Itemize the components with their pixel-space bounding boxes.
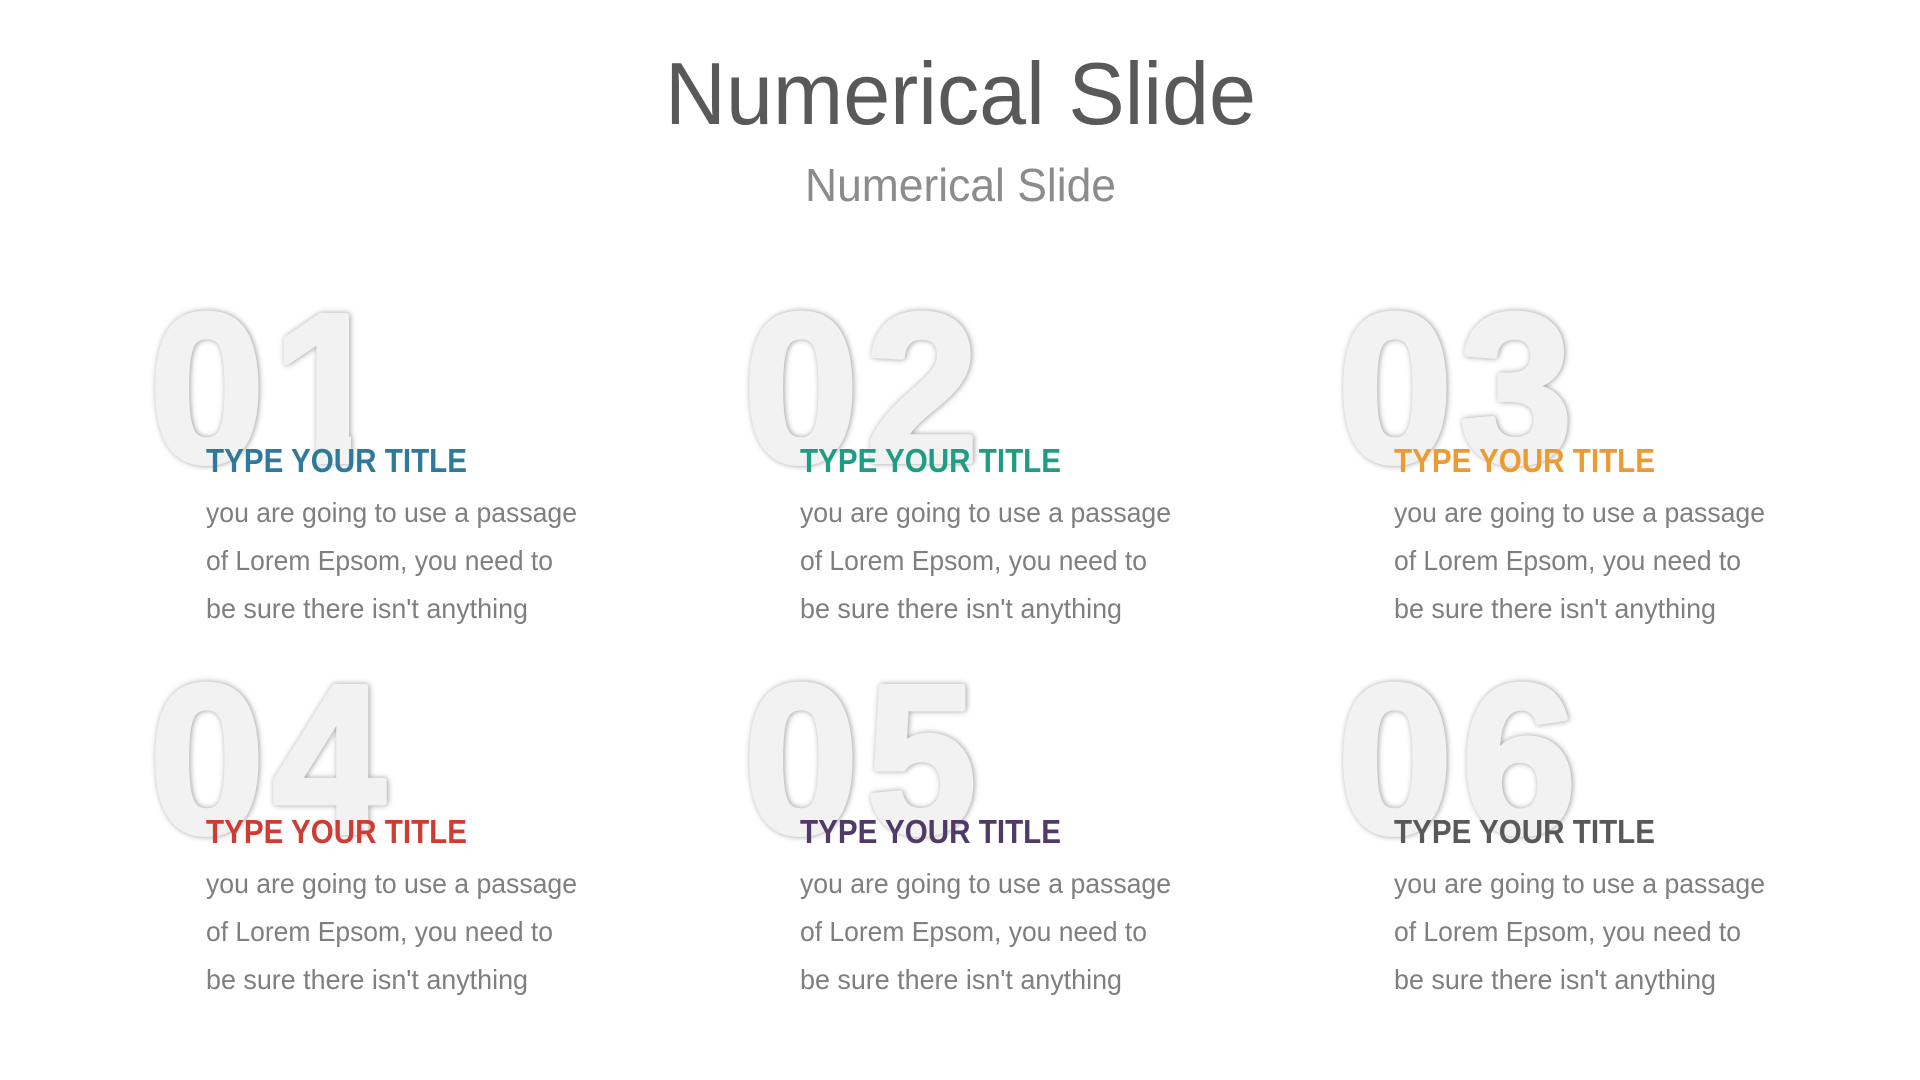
number 01: 1: [273, 270, 383, 506]
number 06: 6: [1462, 641, 1576, 877]
title: Numerical Slide: [665, 44, 1256, 143]
heading 05: TYPE YOUR TITLE: [800, 813, 1061, 850]
body text 06: [1394, 868, 1765, 995]
number 05: 5: [867, 641, 976, 877]
body text 04: of Lorem Epsom, you need to: [206, 916, 553, 947]
body text 03: be sure there isn't anything: [1394, 593, 1716, 624]
heading 06: TYPE YOUR TITLE: [1394, 813, 1655, 850]
body text 06: be sure there isn't anything: [1394, 964, 1716, 995]
body text 05: [800, 868, 1171, 995]
body text 05: you are going to use a passage: [800, 868, 1171, 899]
number 02: 0: [744, 270, 858, 506]
body text 05: of Lorem Epsom, you need to: [800, 916, 1147, 947]
subtitle: Numerical Slide: [805, 159, 1116, 211]
body text 04: you are going to use a passage: [206, 868, 577, 899]
number 04: 4: [273, 641, 385, 877]
body text 06: you are going to use a passage: [1394, 868, 1765, 899]
number 04: [150, 641, 385, 877]
number 05: [744, 641, 976, 877]
body text 03: [1394, 497, 1765, 624]
number 03: 0: [1338, 270, 1452, 506]
panel: item 06: [1338, 641, 1765, 995]
body text 01: you are going to use a passage: [206, 497, 577, 528]
number 06: [1338, 641, 1576, 877]
number 01: 0: [150, 270, 264, 506]
body text 03: of Lorem Epsom, you need to: [1394, 545, 1741, 576]
body text 01: be sure there isn't anything: [206, 593, 528, 624]
body text 01: [206, 497, 577, 624]
body text 02: [800, 497, 1171, 624]
number 01: [152, 307, 356, 470]
panel: item 04: [150, 641, 577, 995]
heading 02: TYPE YOUR TITLE: [800, 442, 1061, 479]
panel: item 05: [744, 641, 1171, 995]
heading 03: TYPE YOUR TITLE: [1394, 442, 1655, 479]
panel: item 01: [152, 307, 576, 624]
body text 01: of Lorem Epsom, you need to: [206, 545, 553, 576]
heading 01: TYPE YOUR TITLE: [206, 442, 467, 479]
number 03: 3: [1460, 270, 1572, 506]
heading 04: TYPE YOUR TITLE: [206, 813, 467, 850]
body text 05: be sure there isn't anything: [800, 964, 1122, 995]
body text 04: [206, 868, 577, 995]
number 03: [1338, 270, 1572, 506]
number 02: [744, 270, 978, 506]
panel: item 03: [1338, 270, 1765, 624]
panel: item 02: [744, 270, 1171, 624]
number 04: 0: [150, 641, 264, 877]
body text 02: of Lorem Epsom, you need to: [800, 545, 1147, 576]
number 05: 0: [744, 641, 858, 877]
body text 02: be sure there isn't anything: [800, 593, 1122, 624]
number 02: 2: [866, 270, 978, 506]
body text 04: be sure there isn't anything: [206, 964, 528, 995]
body text 03: you are going to use a passage: [1394, 497, 1765, 528]
number 06: 0: [1338, 641, 1452, 877]
body text 06: of Lorem Epsom, you need to: [1394, 916, 1741, 947]
body text 02: you are going to use a passage: [800, 497, 1171, 528]
